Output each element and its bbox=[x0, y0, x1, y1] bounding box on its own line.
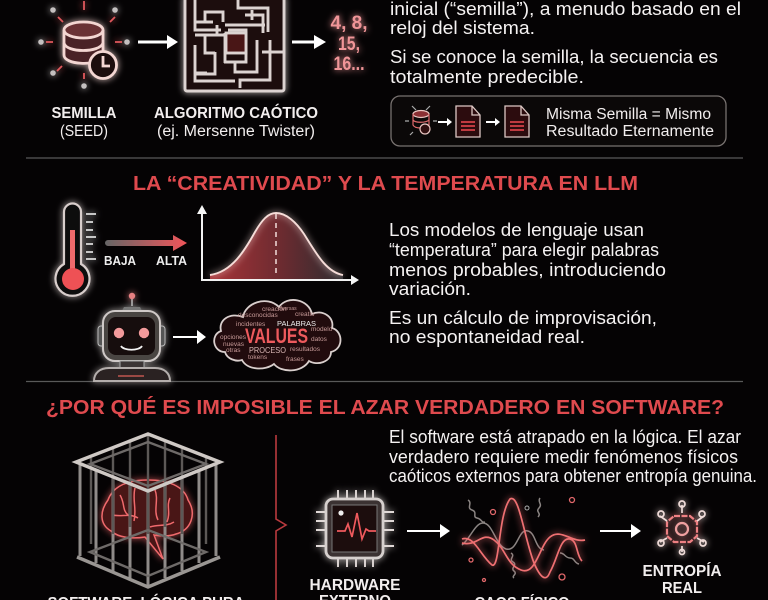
icon: caged brain bbox=[76, 434, 220, 587]
cloud small words: otras bbox=[226, 347, 241, 354]
label: low high: ALTA bbox=[156, 254, 187, 268]
label: external hardware: HARDWARE bbox=[310, 577, 400, 594]
arrow: algorithm to numbers bbox=[292, 35, 326, 49]
text: software explanation bbox=[389, 426, 757, 486]
icon: seed database with clock bbox=[38, 1, 130, 89]
arrow: robot to cloud bbox=[173, 330, 206, 344]
icon: document two bbox=[505, 106, 529, 137]
arrow: hardware to chaos bbox=[407, 524, 450, 538]
cage frame bbox=[76, 434, 220, 587]
cloud small words: diversas bbox=[278, 306, 297, 312]
arrow: seed to algorithm bbox=[138, 35, 178, 49]
word cloud: PROCESO bbox=[249, 345, 286, 355]
cloud small words: modelo bbox=[311, 326, 333, 333]
heading: creativity and temperature: LA “CREATIVIDAD” Y LA TEMPERATURA EN LLM bbox=[133, 172, 638, 195]
output numbers: 15, bbox=[338, 33, 360, 55]
icon: physical chaos waves bbox=[462, 498, 585, 582]
output numbers: 4, 8, bbox=[330, 12, 368, 34]
label: chaotic algorithm: (ej. Mersenne Twister) bbox=[157, 123, 315, 140]
cloud small words: tokens bbox=[248, 354, 268, 361]
text: temperature explanation: no espontaneidad real. bbox=[389, 326, 585, 347]
label: low high: BAJA bbox=[104, 254, 136, 268]
cloud small words: creatio bbox=[295, 311, 315, 318]
cloud small words: desconocidas bbox=[238, 312, 278, 319]
cloud small words: datos bbox=[311, 336, 328, 343]
text: temperature explanation: menos probables, introduciendo bbox=[389, 259, 666, 280]
text: temperature explanation: Es un cálculo de improvisación, bbox=[389, 307, 657, 328]
brain bbox=[102, 480, 192, 559]
label: low high bbox=[104, 254, 187, 268]
label: seed: SEMILLA bbox=[52, 105, 116, 122]
label: real entropy: ENTROPÍA bbox=[642, 563, 722, 580]
cloud small words: opciones bbox=[220, 334, 247, 341]
label: seed: (SEED) bbox=[60, 123, 108, 140]
label: chaotic algorithm bbox=[154, 104, 318, 140]
text: seed explanation bbox=[390, 0, 741, 87]
icon: document one bbox=[456, 106, 480, 137]
label: seed bbox=[52, 105, 116, 140]
text: temperature explanation: variación. bbox=[389, 278, 471, 299]
output numbers: 16... bbox=[334, 53, 364, 75]
cloud main word: VALUES bbox=[245, 325, 308, 348]
icon: small arrows bbox=[438, 118, 500, 126]
arrow: chaos to entropy bbox=[600, 524, 641, 538]
cloud small words: incidentes bbox=[236, 321, 266, 328]
text: temperature explanation: “temperatura” para elegir palabras bbox=[389, 239, 659, 260]
label: chaotic algorithm: ALGORITMO CAÓTICO bbox=[154, 104, 318, 122]
output numbers bbox=[330, 12, 368, 75]
divider lines bbox=[26, 158, 743, 382]
text: software explanation: verdadero requiere medir fenómenos físicos bbox=[389, 446, 738, 467]
label: real entropy: REAL bbox=[662, 580, 702, 597]
text: seed explanation: Si se conoce la semilla, la secuencia es bbox=[390, 46, 718, 67]
label: real entropy bbox=[642, 563, 722, 597]
callout text: Resultado Eternamente bbox=[546, 123, 714, 140]
icon: small seed bbox=[405, 106, 437, 135]
cloud small words: resultados bbox=[290, 346, 321, 353]
heading: why true randomness is impossible: ¿POR QUÉ ES IMPOSIBLE EL AZAR VERDADERO EN SOFTWARE? bbox=[46, 396, 724, 419]
icon: real entropy bbox=[658, 501, 706, 554]
text: temperature explanation bbox=[389, 219, 666, 347]
arrow: low to high bbox=[105, 235, 187, 251]
text: seed explanation: reloj del sistema. bbox=[390, 17, 535, 38]
text: temperature explanation: Los modelos de lenguaje usan bbox=[389, 219, 644, 240]
callout text: Misma Semilla = Mismo bbox=[546, 106, 711, 123]
cloud small words: frases bbox=[286, 356, 304, 363]
word cloud bbox=[214, 300, 340, 370]
cage bars bbox=[80, 434, 216, 586]
icon: thermometer bbox=[56, 204, 96, 296]
chart: probability bell curve bbox=[197, 205, 359, 285]
icon: maze bbox=[185, 0, 284, 91]
callout: same seed same result bbox=[391, 96, 726, 146]
callout text bbox=[546, 106, 714, 140]
icon: hardware chip bbox=[316, 490, 394, 567]
cloud small words: nuevas bbox=[223, 341, 245, 348]
bracket divider bbox=[276, 435, 286, 600]
cloud small words: PALABRAS bbox=[277, 319, 316, 328]
text: software explanation: El software está atrapado en la lógica. El azar bbox=[389, 426, 741, 447]
cloud small words: creación bbox=[262, 306, 287, 313]
icon: robot bbox=[94, 293, 170, 381]
cloud small words bbox=[220, 306, 333, 363]
text: seed explanation: totalmente predecible. bbox=[390, 66, 584, 87]
